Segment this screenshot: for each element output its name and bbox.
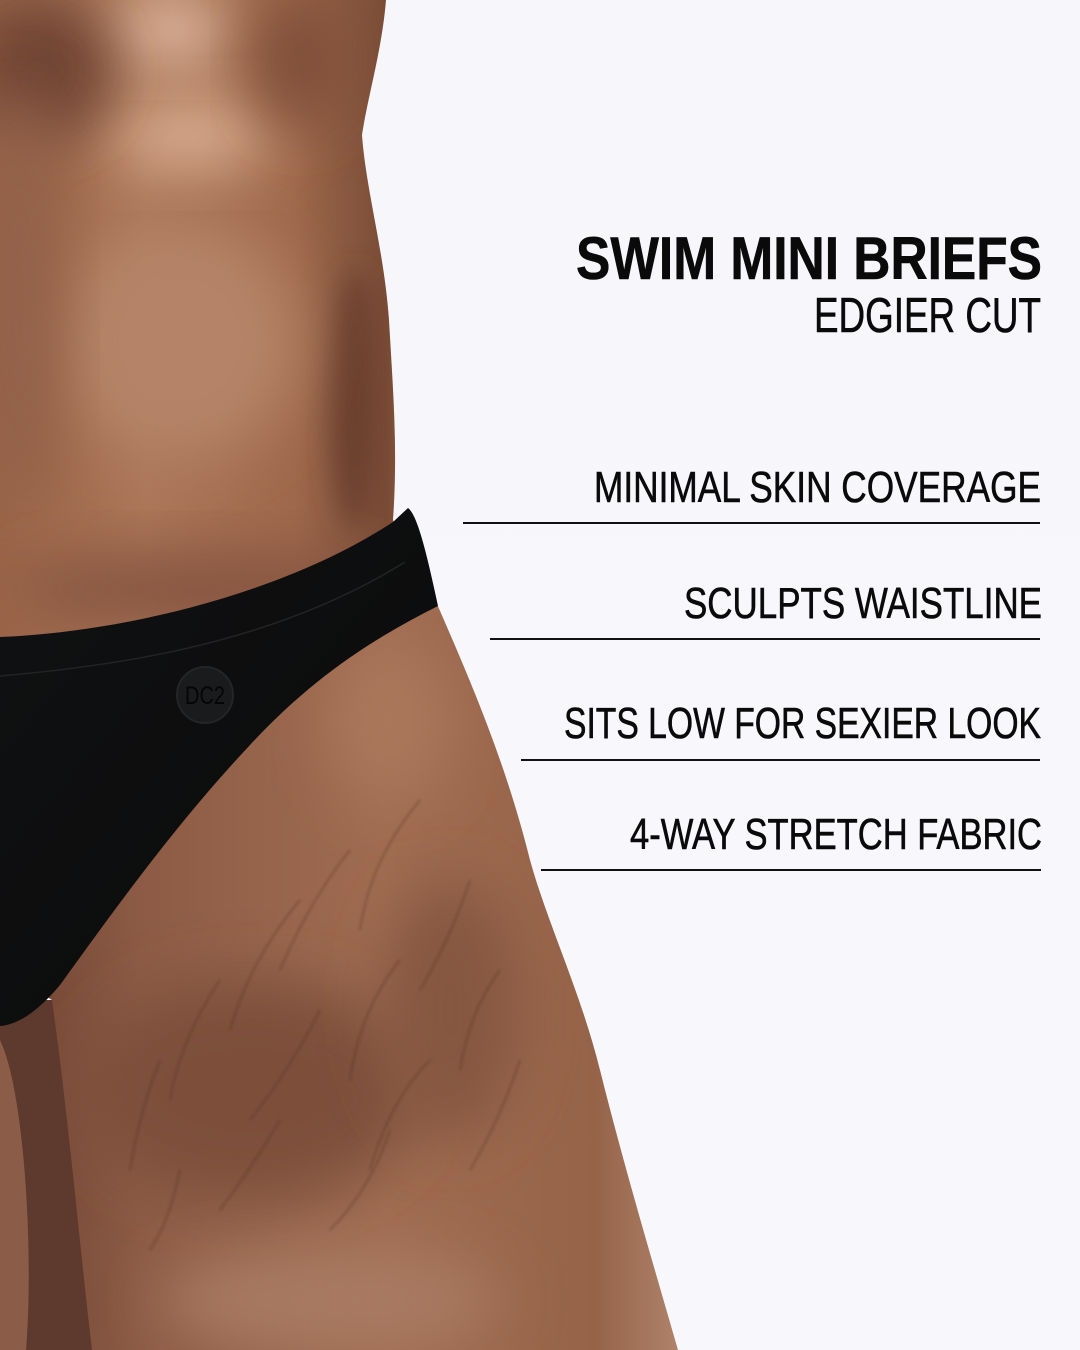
photo: model torso and swim briefs <box>0 0 700 1350</box>
badge logo: DC2 <box>185 682 225 710</box>
heading block <box>576 225 1042 343</box>
badge logo <box>177 667 233 723</box>
leg <box>48 606 678 1350</box>
swim briefs <box>0 508 438 1026</box>
leg hair texture <box>130 800 520 1250</box>
torso <box>0 0 396 637</box>
waistband seam <box>0 562 405 676</box>
inner thigh, other leg <box>0 1000 110 1350</box>
feature list <box>463 463 1042 871</box>
